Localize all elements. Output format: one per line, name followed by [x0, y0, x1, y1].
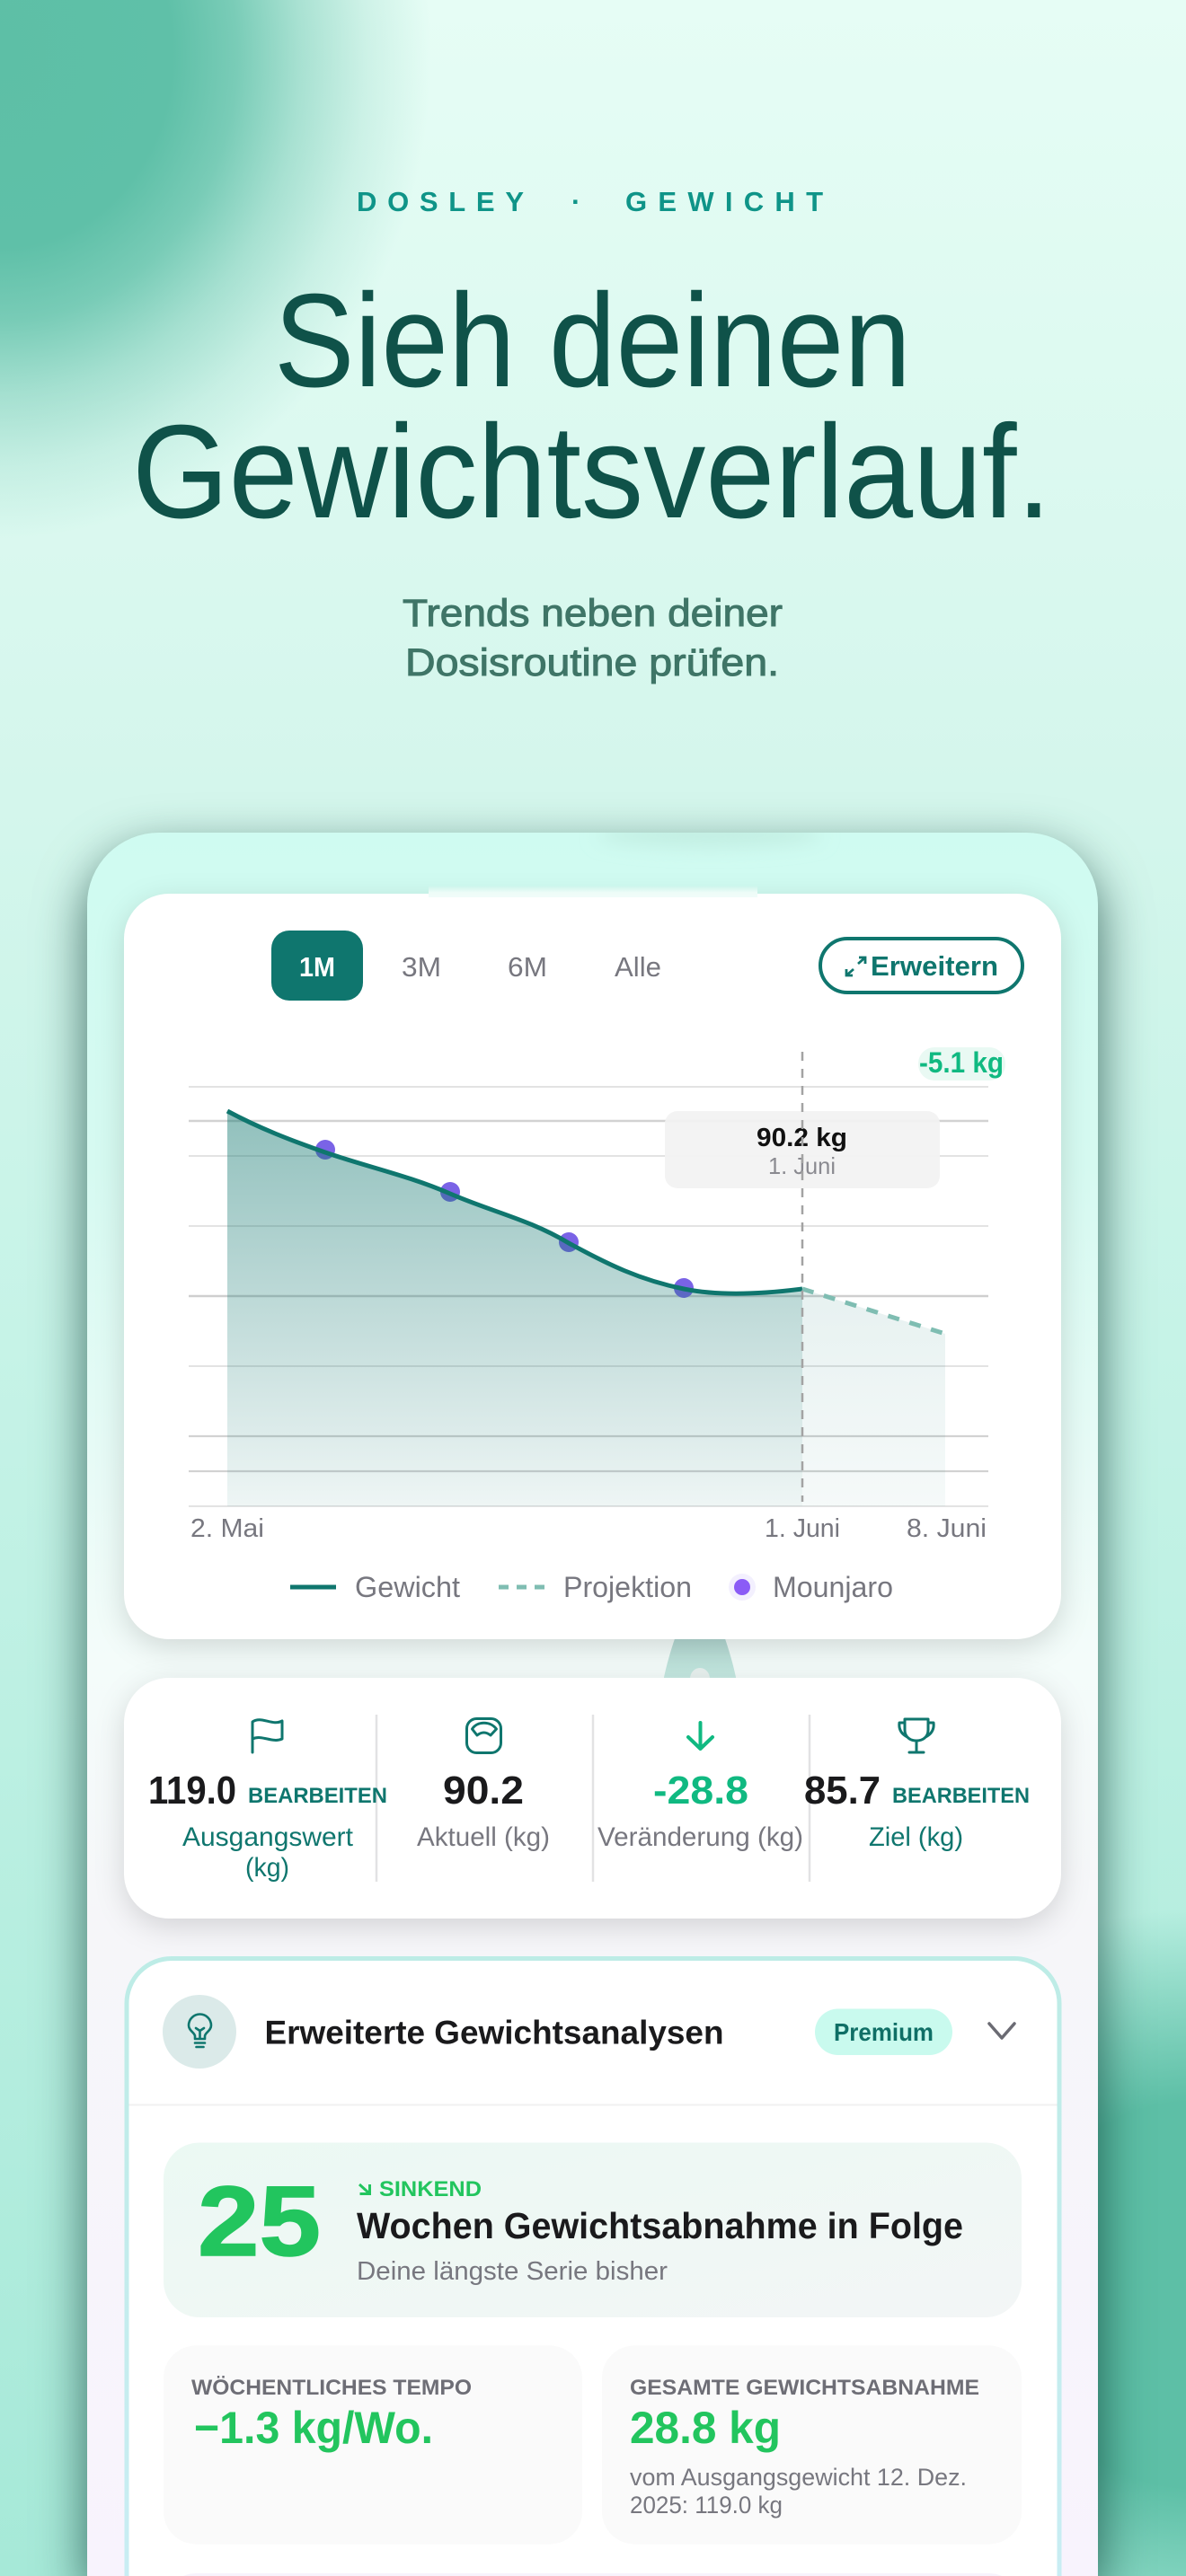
- premium badge: Premium: [834, 2018, 934, 2046]
- icon: arrow down: [688, 1723, 712, 1749]
- streak card: Deine längste Serie bisher: [357, 2257, 668, 2286]
- stat: goal: BEARBEITEN: [892, 1784, 1030, 1808]
- panel: weight stats: [124, 1678, 1061, 1919]
- icon: chevron: [989, 2024, 1014, 2038]
- Mounjaro dose markers: [315, 1140, 694, 1298]
- tooltip: 90.2 kg: [757, 1124, 847, 1152]
- projection line: [802, 1289, 945, 1334]
- tile: total loss: vom Ausgangsgewicht 12. Dez.: [630, 2464, 967, 2491]
- title: [132, 267, 1051, 546]
- tile: weekly pace: −1.3 kg/Wo.: [194, 2403, 433, 2453]
- stat: goal: 85.7: [804, 1769, 881, 1813]
- icon: light bulb: [163, 1995, 236, 2069]
- stat: current weight: [417, 1719, 550, 1852]
- phone mockup: [87, 824, 1098, 2576]
- stat: change: [597, 1723, 803, 1852]
- stat: change: Veränderung (kg): [597, 1822, 803, 1852]
- stat dividers: [376, 1715, 810, 1882]
- icon: scale: [467, 1719, 501, 1753]
- title: Gewichtsverlauf.: [132, 398, 1051, 546]
- panel: advanced analytics: [127, 1958, 1059, 2576]
- streak card: Wochen Gewichtsabnahme in Folge: [357, 2205, 963, 2246]
- icon: trophy: [899, 1719, 934, 1752]
- stat: goal: Ziel (kg): [869, 1822, 963, 1852]
- streak card: SINKEND: [379, 2177, 482, 2201]
- tile: total loss: [602, 2346, 1022, 2544]
- tile: total loss: 2025: 119.0 kg: [630, 2492, 783, 2519]
- grid lines: [189, 1087, 988, 1506]
- subtitle: Trends neben deiner: [403, 592, 783, 635]
- range tabs: [271, 931, 661, 1001]
- highlight strip: [429, 886, 757, 897]
- tile: total loss: GESAMTE GEWICHTSABNAHME: [630, 2376, 979, 2400]
- legend: [290, 1571, 893, 1603]
- next tile, cropped: [183, 2573, 1002, 2576]
- weight line: [227, 1111, 802, 1293]
- range tabs: Alle: [615, 951, 661, 983]
- legend: Projektion: [563, 1571, 692, 1603]
- tile: weekly pace: WÖCHENTLICHES TEMPO: [191, 2376, 472, 2400]
- tooltip: 1. Juni: [768, 1152, 836, 1179]
- stat: goal: [804, 1719, 1030, 1852]
- icon: flag: [252, 1720, 282, 1752]
- x axis labels: [190, 1514, 987, 1543]
- subtitle: Dosisroutine prüfen.: [405, 641, 779, 684]
- eyebrow: DOSLEY GEWICHT: DOSLEY: [357, 186, 524, 217]
- legend: Mounjaro: [773, 1571, 893, 1603]
- tooltip: [665, 1111, 940, 1188]
- eyebrow: DOSLEY GEWICHT: ·: [571, 186, 580, 217]
- range tabs: 1M: [299, 951, 335, 983]
- title: Sieh deinen: [274, 267, 911, 415]
- line chart: [189, 1046, 1005, 1543]
- eyebrow: DOSLEY GEWICHT: [357, 186, 823, 217]
- expand button: [820, 939, 1022, 992]
- stat: change: -28.8: [653, 1769, 748, 1813]
- x axis labels: 8. Juni: [907, 1514, 987, 1543]
- notch glow: [622, 833, 798, 846]
- stat: baseline weight: (kg): [245, 1853, 289, 1883]
- stat: baseline weight: Ausgangswert: [182, 1822, 354, 1852]
- range tabs: 6M: [508, 951, 547, 983]
- stat: current weight: Aktuell (kg): [417, 1822, 550, 1852]
- current date marker: [801, 1052, 803, 1502]
- stat: baseline weight: [148, 1720, 387, 1883]
- icon: trend arrow: [359, 2184, 370, 2193]
- range tabs: 3M: [402, 951, 441, 983]
- eyebrow: DOSLEY GEWICHT: GEWICHT: [625, 186, 823, 217]
- projection area: [802, 1289, 945, 1506]
- tile: total loss: 28.8 kg: [630, 2403, 781, 2453]
- subtitle: [403, 592, 783, 684]
- streak card: [164, 2143, 1022, 2317]
- droplet watermark behind cards: [660, 1581, 739, 1698]
- analytics heading: Erweiterte Gewichtsanalysen: [264, 2014, 724, 2051]
- stat: baseline weight: 119.0: [148, 1769, 236, 1813]
- panel: chart card: [124, 886, 1061, 1639]
- expand button: Erweitern: [871, 950, 998, 982]
- stat: current weight: 90.2: [443, 1769, 524, 1813]
- legend: Gewicht: [355, 1571, 460, 1603]
- x axis labels: 1. Juni: [765, 1514, 840, 1543]
- tile: weekly pace: [164, 2346, 582, 2544]
- streak card: 25: [198, 2166, 321, 2277]
- weight area: [227, 1111, 802, 1506]
- change badge: -5.1 kg: [919, 1046, 1004, 1079]
- premium badge: [815, 2008, 952, 2055]
- x axis labels: 2. Mai: [190, 1514, 264, 1543]
- stat: baseline weight: BEARBEITEN: [248, 1784, 387, 1808]
